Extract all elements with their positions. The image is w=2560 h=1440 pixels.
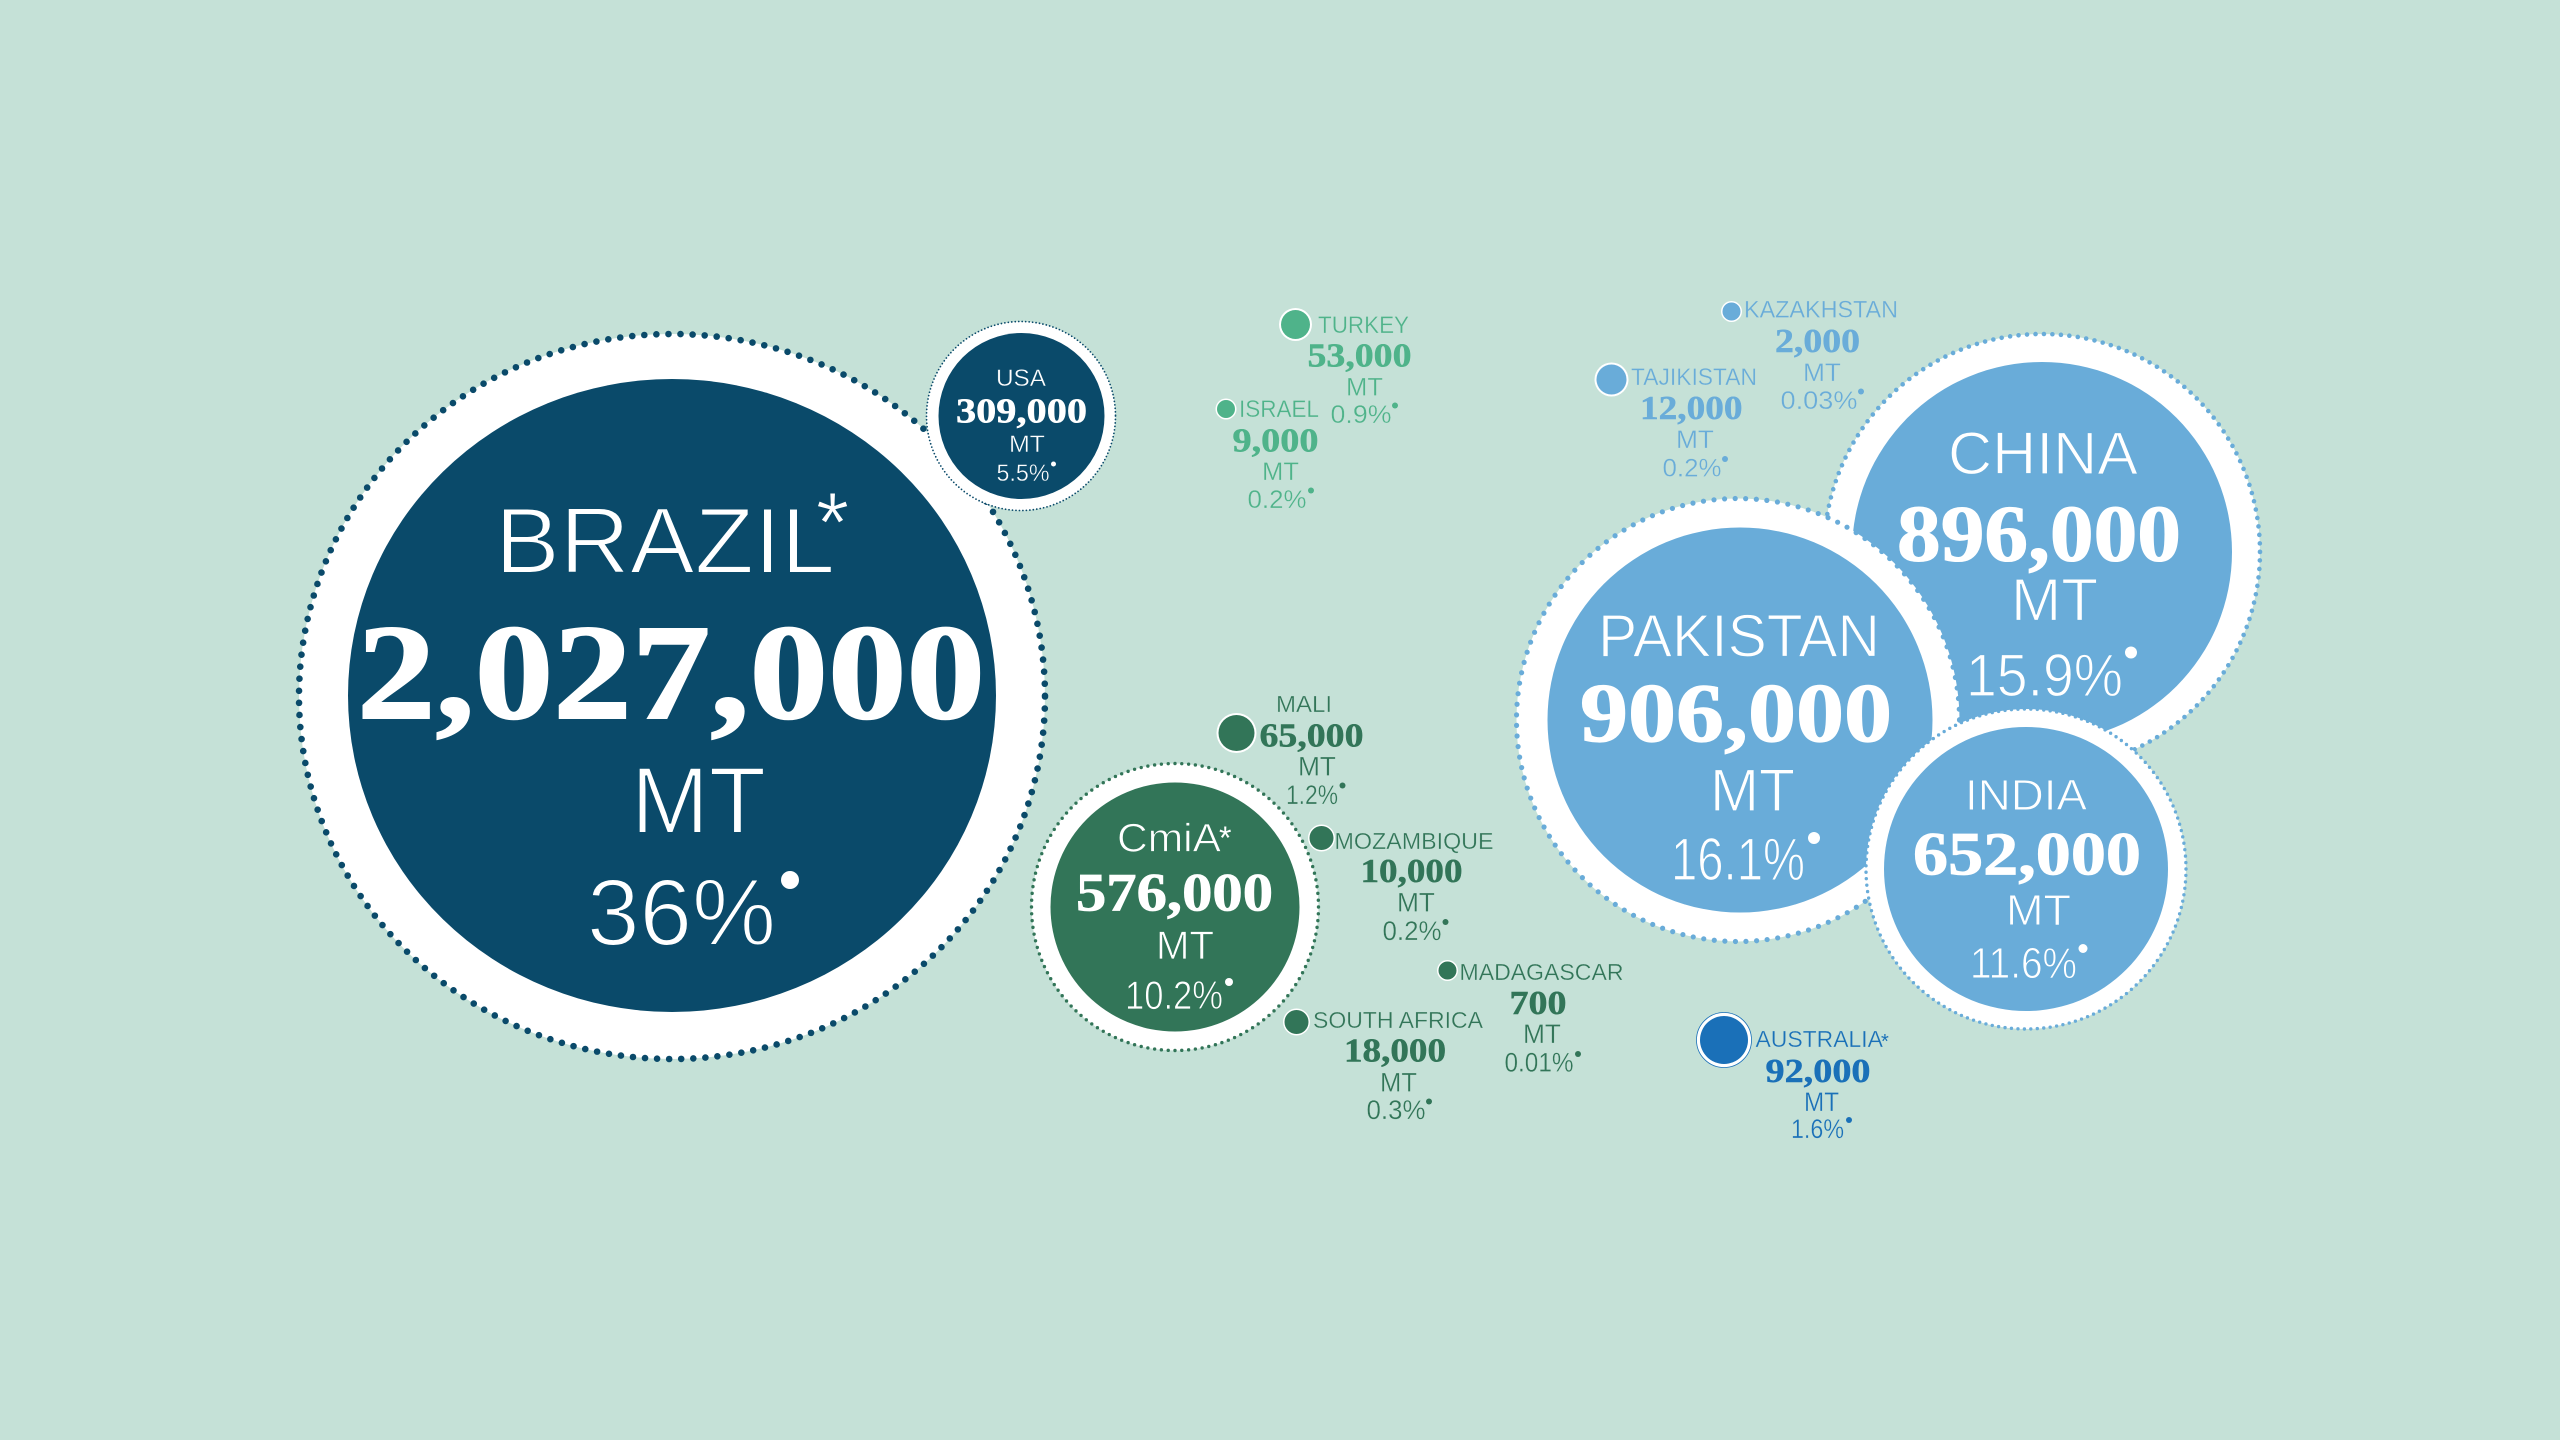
share: Israel percent: 0.2% bbox=[1248, 486, 1306, 514]
dot: USA percent marker bbox=[1051, 462, 1056, 466]
unit: South Africa MT: MT bbox=[1380, 1068, 1417, 1098]
share: Mozambique percent: 0.2% bbox=[1382, 916, 1442, 946]
share: South Africa percent: 0.3% bbox=[1366, 1095, 1426, 1125]
share: Turkey percent: 0.9% bbox=[1330, 401, 1392, 429]
share: China percent: 15.9% bbox=[1966, 642, 2123, 709]
label: Turkey: TURKEY bbox=[1318, 312, 1409, 339]
share: Tajikistan percent: 0.2% bbox=[1662, 454, 1722, 482]
dot: Brazil percent marker bbox=[781, 871, 799, 889]
dot: Australia percent marker bbox=[1846, 1117, 1852, 1123]
panel: India bubble bbox=[1866, 709, 2186, 1029]
group: Turkey bbox=[1279, 308, 1412, 429]
unit: Australia MT: MT bbox=[1804, 1087, 1839, 1117]
dot: Madagascar percent marker bbox=[1575, 1051, 1581, 1057]
unit: Mali MT: MT bbox=[1298, 752, 1336, 782]
label: Israel: ISRAEL bbox=[1239, 396, 1319, 423]
share: Mali percent: 1.2% bbox=[1286, 780, 1338, 810]
label: South Africa: SOUTH AFRICA bbox=[1313, 1007, 1484, 1033]
dot: Kazakhstan percent marker bbox=[1858, 388, 1864, 394]
unit: Kazakhstan MT: MT bbox=[1803, 359, 1841, 387]
value: Brazil tonnage: 2,027,000 bbox=[357, 598, 985, 748]
value: Turkey tonnage: 53,000 bbox=[1308, 338, 1412, 374]
share: Madagascar percent: 0.01% bbox=[1504, 1048, 1574, 1078]
group: Australia bbox=[1696, 1012, 1889, 1144]
share: Australia percent: 1.6% bbox=[1791, 1114, 1844, 1144]
value: China tonnage: 896,000 bbox=[1897, 490, 2181, 578]
label: Mali: MALI bbox=[1276, 691, 1332, 717]
value: CmiA tonnage: 576,000 bbox=[1076, 862, 1273, 922]
dot: Pakistan percent marker bbox=[1808, 832, 1820, 844]
value: Mali tonnage: 65,000 bbox=[1260, 718, 1364, 754]
unit: Pakistan MT: MT bbox=[1710, 757, 1795, 824]
value: South Africa tonnage: 18,000 bbox=[1344, 1032, 1446, 1070]
value: Mozambique tonnage: 10,000 bbox=[1360, 853, 1462, 890]
unit: Turkey MT: MT bbox=[1346, 374, 1383, 402]
unit: CmiA MT: MT bbox=[1156, 924, 1214, 968]
panel: USA bubble bbox=[926, 322, 1116, 510]
unit: Israel MT: MT bbox=[1262, 458, 1299, 486]
unit: India MT: MT bbox=[2006, 886, 2071, 935]
unit: Brazil MT: MT bbox=[631, 748, 766, 854]
label: Kazakhstan: KAZAKHSTAN bbox=[1744, 296, 1898, 324]
value: Israel tonnage: 9,000 bbox=[1232, 422, 1318, 460]
group: Mali bbox=[1216, 691, 1364, 810]
share: Kazakhstan percent: 0.03% bbox=[1780, 387, 1858, 415]
dot: China percent marker bbox=[2125, 646, 2137, 658]
group: South Africa bbox=[1283, 1007, 1484, 1125]
heading: India: INDIA bbox=[1965, 771, 2088, 820]
unit: USA MT: MT bbox=[1009, 431, 1045, 458]
value: Tajikistan tonnage: 12,000 bbox=[1640, 390, 1742, 427]
panel: CmiA bubble bbox=[1032, 764, 1318, 1050]
dot: Israel percent marker bbox=[1308, 488, 1314, 494]
share: USA percent: 5.5% bbox=[996, 460, 1050, 487]
dot: India percent marker bbox=[2078, 944, 2088, 953]
footnote mark: Brazil asterisk: * bbox=[816, 476, 849, 571]
dot: South Africa percent marker bbox=[1426, 1098, 1432, 1104]
group: Kazakhstan bbox=[1721, 296, 1898, 415]
panel: Brazil bubble bbox=[299, 334, 1045, 1059]
heading: USA: USA bbox=[996, 365, 1046, 392]
heading: CmiA: CmiA bbox=[1117, 816, 1221, 860]
panel: China bubble bbox=[1824, 334, 2260, 770]
label: Mozambique: MOZAMBIQUE bbox=[1334, 828, 1494, 854]
unit: Mozambique MT: MT bbox=[1397, 888, 1435, 918]
footnote mark: CmiA asterisk: * bbox=[1219, 820, 1231, 856]
label: Madagascar: MADAGASCAR bbox=[1460, 959, 1624, 985]
heading: Brazil: BRAZIL bbox=[495, 488, 835, 593]
value: Kazakhstan tonnage: 2,000 bbox=[1775, 323, 1860, 360]
value: Australia tonnage: 92,000 bbox=[1766, 1053, 1870, 1090]
dot: Mozambique percent marker bbox=[1442, 919, 1448, 925]
value: India tonnage: 652,000 bbox=[1913, 822, 2141, 888]
share: Brazil percent: 36% bbox=[587, 860, 776, 966]
heading: Pakistan: PAKISTAN bbox=[1598, 602, 1880, 670]
value: Madagascar tonnage: 700 bbox=[1510, 985, 1566, 1022]
label: Tajikistan: TAJIKISTAN bbox=[1631, 364, 1757, 391]
unit: Tajikistan MT: MT bbox=[1676, 426, 1714, 454]
group: Israel bbox=[1216, 396, 1319, 514]
dot: CmiA percent marker bbox=[1225, 978, 1233, 986]
unit: China MT: MT bbox=[2011, 566, 2098, 634]
dot: Mali percent marker bbox=[1340, 782, 1346, 788]
share: India percent: 11.6% bbox=[1970, 939, 2077, 988]
label: Australia: AUSTRALIA bbox=[1756, 1026, 1884, 1052]
unit: Madagascar MT: MT bbox=[1523, 1019, 1561, 1049]
footnote mark: Australia asterisk: * bbox=[1881, 1031, 1889, 1053]
group: Tajikistan bbox=[1594, 362, 1757, 482]
value: Pakistan tonnage: 906,000 bbox=[1580, 667, 1892, 760]
dot: Tajikistan percent marker bbox=[1722, 456, 1728, 462]
panel: Pakistan bubble bbox=[1516, 498, 1960, 942]
dot: Turkey percent marker bbox=[1392, 402, 1398, 408]
heading: China: CHINA bbox=[1948, 420, 2138, 487]
share: CmiA percent: 10.2% bbox=[1125, 974, 1223, 1018]
group: Mozambique bbox=[1308, 824, 1494, 946]
group: Madagascar bbox=[1437, 959, 1624, 1078]
share: Pakistan percent: 16.1% bbox=[1671, 826, 1805, 893]
value: USA tonnage: 309,000 bbox=[956, 392, 1087, 430]
